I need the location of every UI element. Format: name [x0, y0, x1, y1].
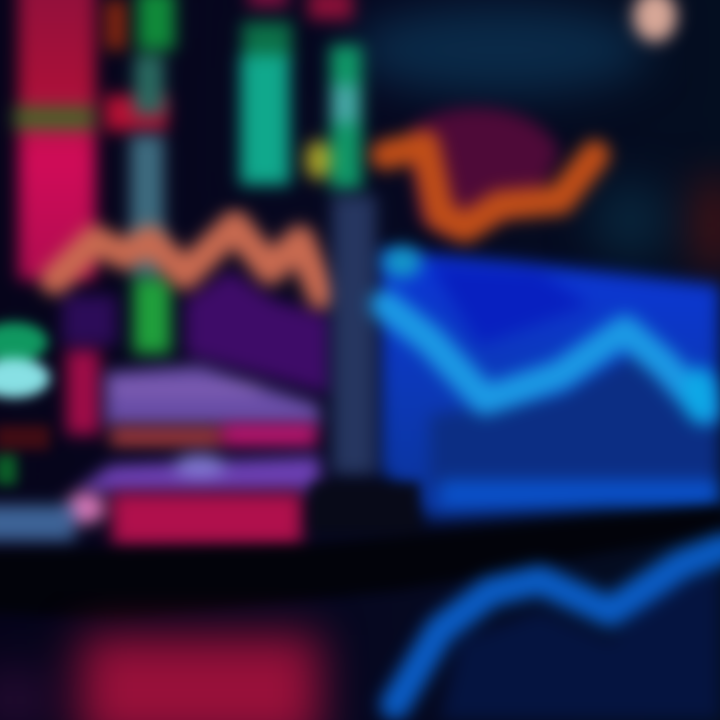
peach light — [633, 0, 677, 42]
orange line right — [385, 145, 595, 228]
blue panel — [380, 250, 720, 520]
lavender area chart — [105, 365, 320, 425]
candlestick: green and yellow column — [305, 0, 362, 190]
cyan line chart — [382, 246, 718, 423]
lavender lower strip — [75, 454, 320, 492]
dark stand base and shelf — [0, 482, 720, 618]
crimson block — [0, 492, 302, 545]
red reflection — [0, 635, 320, 720]
left green and white blob — [0, 322, 50, 485]
blue reflection — [395, 548, 720, 720]
pink and orange band — [110, 424, 317, 446]
background glow: upper right — [350, 5, 720, 270]
candlestick: teal column — [240, 0, 292, 185]
grey stand — [332, 195, 376, 475]
orange line left — [55, 225, 322, 295]
candlestick: crimson column — [14, 0, 167, 280]
candlestick: green and grey column — [130, 0, 175, 354]
purple wave area — [62, 270, 330, 435]
dark red backdrop behind orange line — [410, 108, 560, 235]
